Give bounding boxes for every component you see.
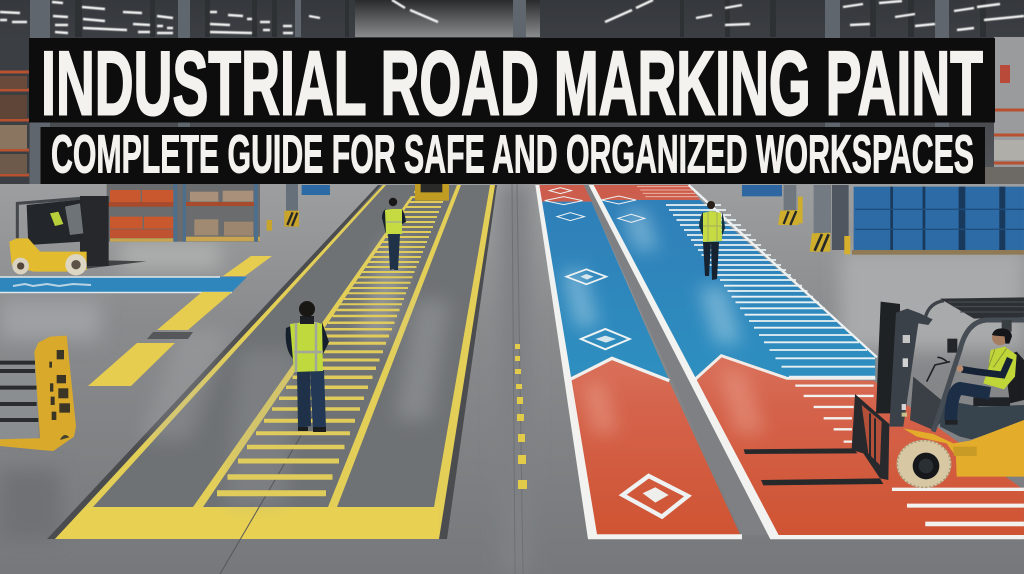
driver head xyxy=(992,329,1008,345)
cab frame xyxy=(925,301,944,317)
right lane red xyxy=(695,357,1024,535)
worker mid right xyxy=(699,201,725,280)
background shelving left xyxy=(107,183,449,242)
driver vest xyxy=(983,347,1017,389)
driver arm xyxy=(962,358,1010,375)
concrete floor xyxy=(0,184,1024,574)
right lane border xyxy=(589,185,1024,539)
floor grate xyxy=(147,332,193,339)
left lane red xyxy=(570,358,740,535)
wheel xyxy=(897,440,951,488)
mast xyxy=(876,302,900,413)
forklift front right xyxy=(744,297,1024,488)
warehouse ceiling background xyxy=(0,0,1024,190)
yellow floor patches xyxy=(88,256,272,386)
white stripes on red xyxy=(795,386,1024,524)
side racks right xyxy=(984,37,1024,187)
rear body dark xyxy=(940,400,1024,439)
gap strip xyxy=(584,185,775,535)
side racks left xyxy=(0,37,29,187)
forklift top left xyxy=(9,196,147,275)
blue crossing band xyxy=(0,277,247,292)
carriage xyxy=(852,394,889,480)
forks xyxy=(744,448,857,454)
driver legs xyxy=(951,388,990,420)
left lane blue xyxy=(540,202,669,381)
red and blue lanes xyxy=(535,185,1024,539)
left lane border xyxy=(535,185,742,539)
ceiling lights xyxy=(0,0,1024,33)
cab interior xyxy=(910,377,953,430)
worker mid left xyxy=(382,198,406,270)
centre yellow dashes xyxy=(515,344,527,489)
worker front xyxy=(286,301,329,432)
yellow cart left xyxy=(0,336,76,451)
diamonds xyxy=(545,188,688,517)
yellow lane marking: road interior xyxy=(47,185,497,574)
title band xyxy=(29,34,995,134)
subtitle band xyxy=(40,124,985,184)
right lane blue xyxy=(599,200,875,380)
left lane red head xyxy=(538,185,592,202)
ladder rungs xyxy=(217,192,447,493)
right lane red head xyxy=(593,185,700,200)
background crates right xyxy=(742,185,1024,255)
yellow body xyxy=(903,420,1024,477)
reflections xyxy=(562,210,742,343)
white ladder stripes on blue xyxy=(666,205,875,377)
